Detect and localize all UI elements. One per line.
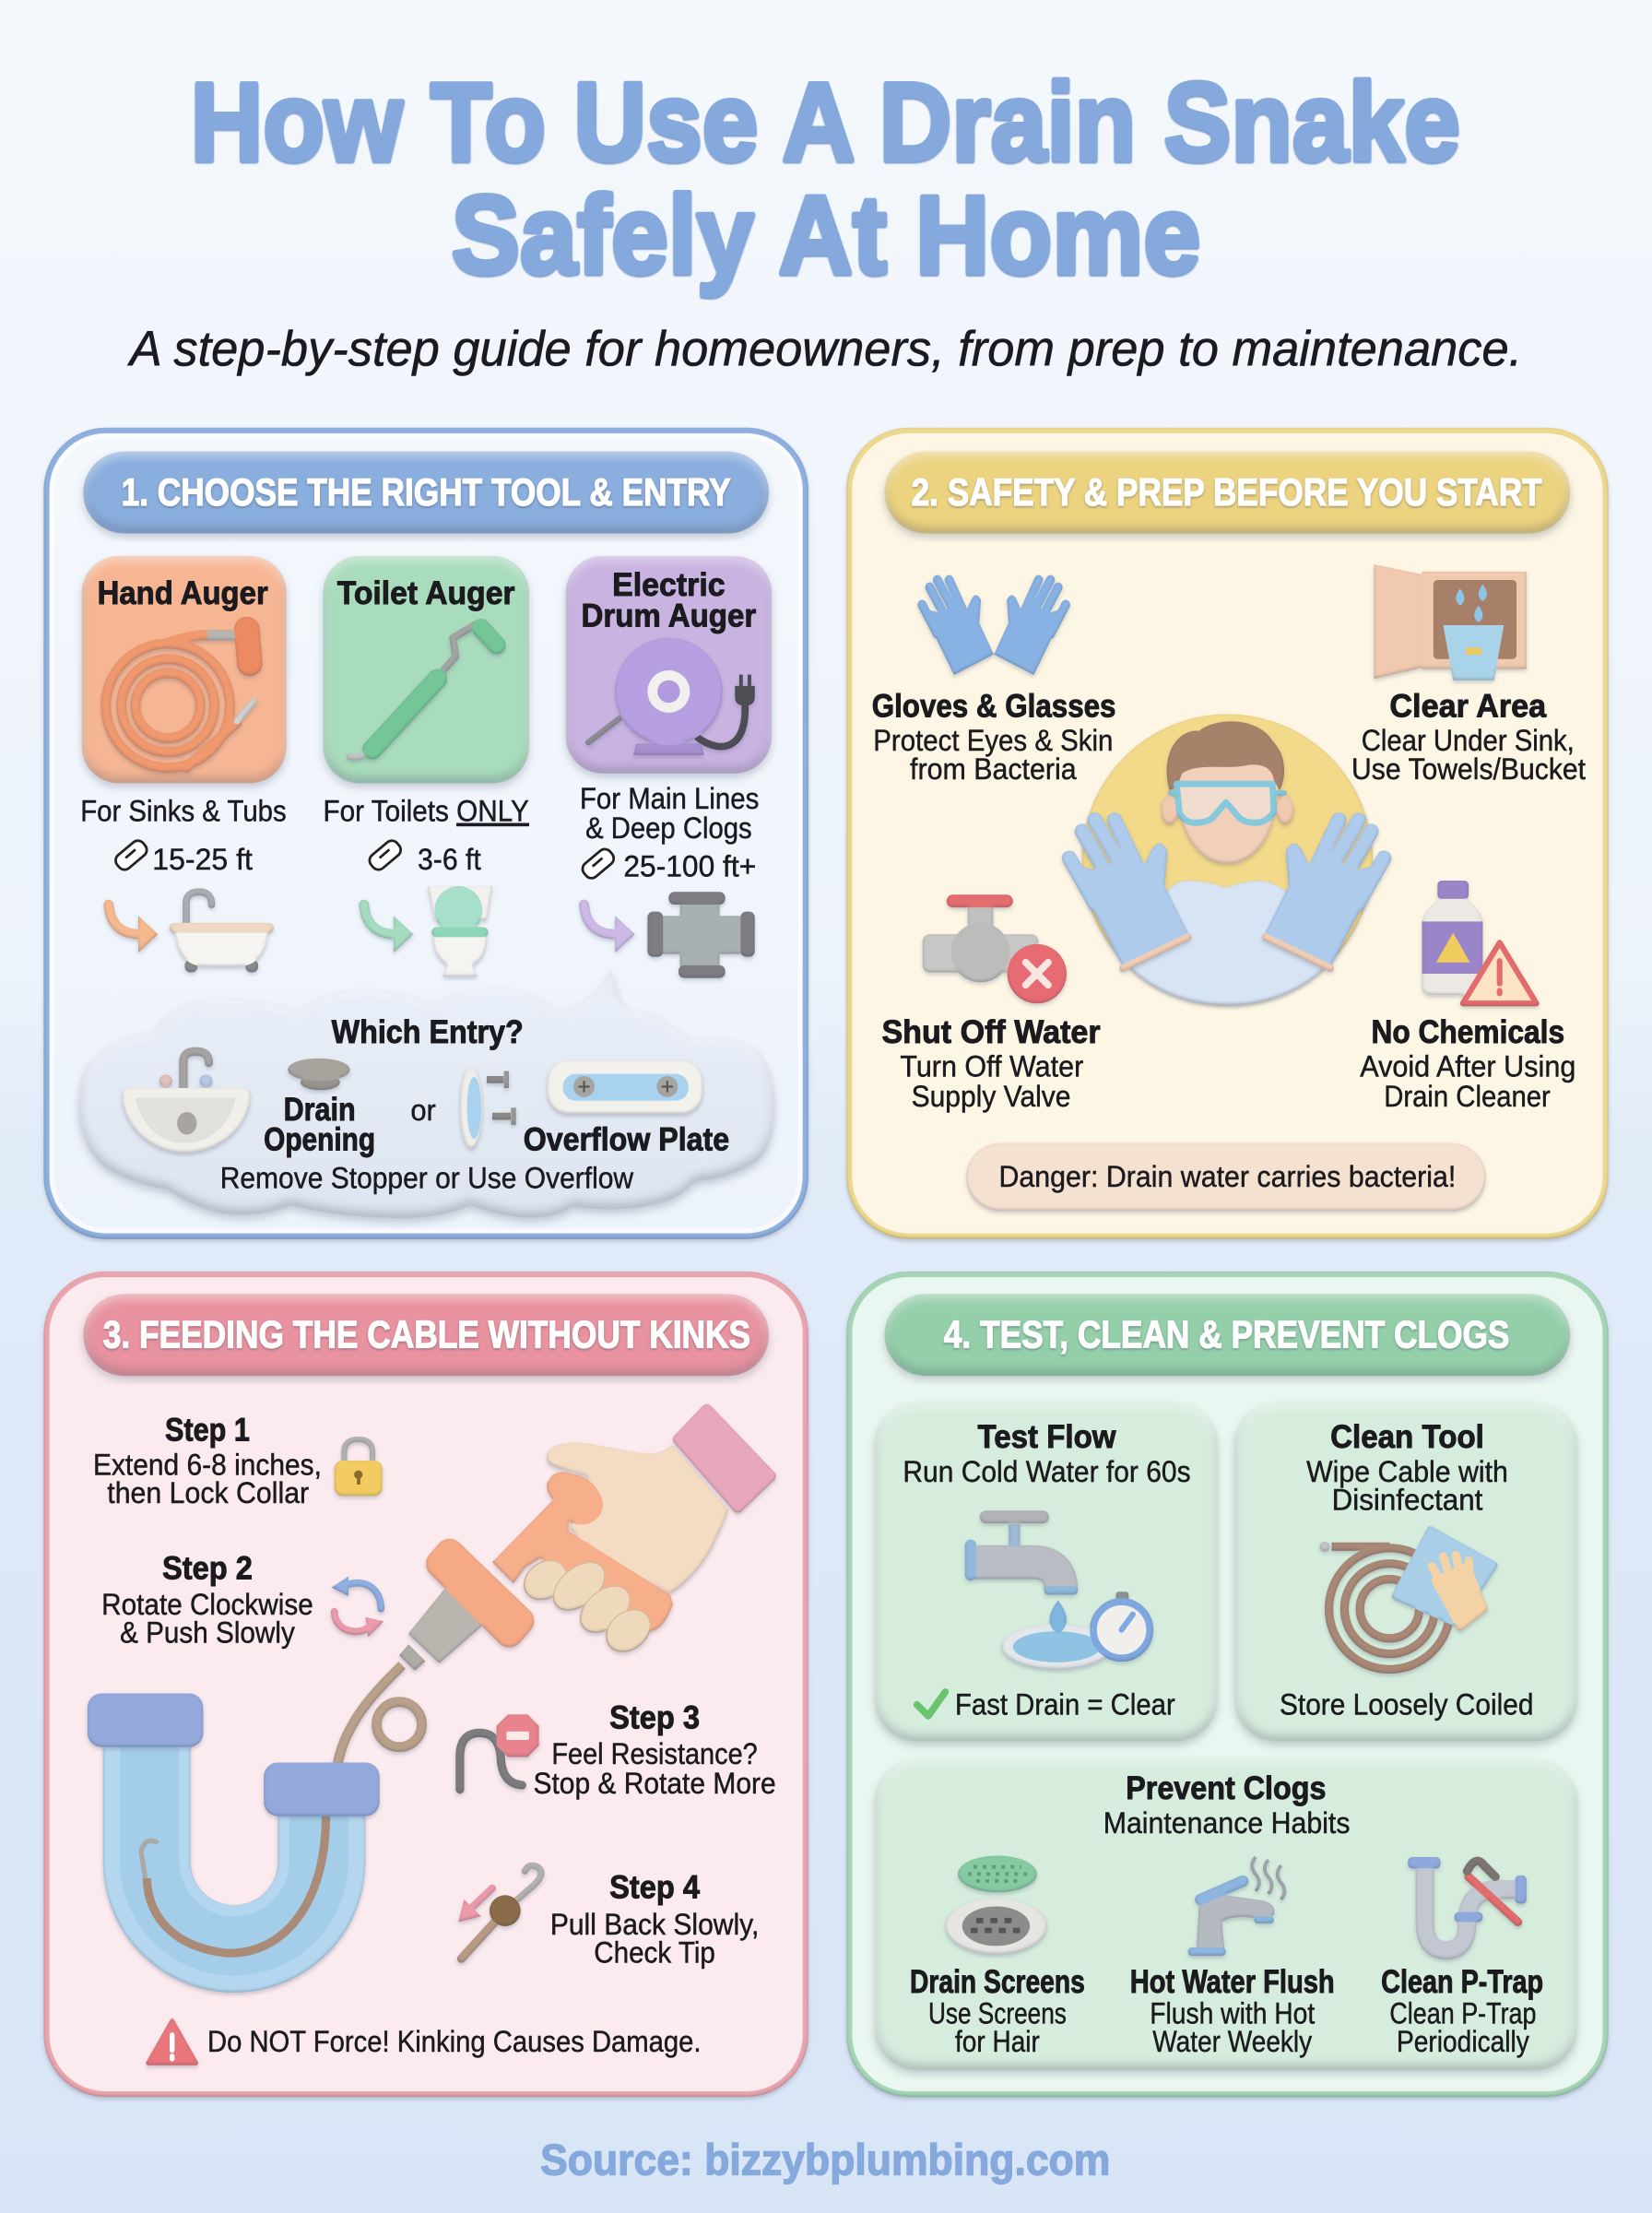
- title: How To Use A Drain Snake: [191, 61, 1460, 183]
- card: prevent clogs: Drain Screens: [910, 1964, 1085, 2000]
- danger callout: [966, 1143, 1485, 1211]
- danger callout: Danger: Drain water carries bacteria!: [998, 1160, 1456, 1193]
- step 1 text: Step 1: [165, 1413, 250, 1449]
- card: clean tool: [1234, 1402, 1577, 1741]
- step 2 text: Step 2: [162, 1551, 253, 1587]
- figure body: [1131, 881, 1323, 1005]
- left glove: [1069, 820, 1188, 968]
- callout cloud: which entry: Opening: [264, 1121, 375, 1157]
- card: prevent clogs: Periodically: [1397, 2025, 1529, 2058]
- card: test flow: Test Flow: [978, 1419, 1116, 1455]
- icon: sink: [122, 1051, 251, 1153]
- no chemicals text: Drain Cleaner: [1384, 1080, 1551, 1113]
- warning: do not force: Do NOT Force! Kinking Causes Damage.: [207, 2025, 702, 2058]
- icon: bathtub: [170, 892, 274, 972]
- icon: blue gloves: [922, 580, 1066, 674]
- shut off water text: [881, 1014, 1101, 1113]
- clear area text: [1351, 688, 1586, 786]
- callout cloud: which entry: Drain: [284, 1092, 356, 1128]
- tool descriptions: For Sinks & Tubs: [80, 795, 287, 828]
- tool card: toilet auger: [323, 556, 529, 783]
- icon: overflow plate: [548, 1060, 702, 1114]
- icon: pull back with debris: [458, 1865, 541, 1959]
- heading pill 1: 1. CHOOSE THE RIGHT TOOL & ENTRY: [122, 471, 731, 514]
- heading pill 4: 4. TEST, CLEAN & PREVENT CLOGS: [944, 1314, 1509, 1356]
- heading pill 4: [885, 1294, 1570, 1376]
- figure head and goggles: [1161, 721, 1293, 864]
- panel 1: choose the right tool and entry: [47, 431, 806, 1237]
- cable lengths with tape icons: 15-25 ft: [152, 843, 253, 876]
- step 1 text: Extend 6-8 inches,: [93, 1448, 322, 1481]
- heading pill 3: 3. FEEDING THE CABLE WITHOUT KINKS: [103, 1314, 750, 1356]
- panel 3: feeding the cable: [47, 1274, 806, 2094]
- card: test flow: Run Cold Water for 60s: [903, 1455, 1191, 1488]
- icon: chemical bottle and warning: [1422, 881, 1537, 1003]
- step 3 text: [533, 1700, 776, 1800]
- card: clean tool: Clean Tool: [1330, 1419, 1484, 1455]
- card: prevent clogs: Maintenance Habits: [1103, 1806, 1351, 1840]
- step 2 text: Rotate Clockwise: [101, 1588, 313, 1621]
- card: prevent clogs: Prevent Clogs: [1126, 1770, 1326, 1806]
- panel 4: test, clean and prevent: [849, 1274, 1605, 2094]
- tool card: electric drum auger: Electric: [612, 567, 726, 603]
- callout cloud: which entry: or: [410, 1094, 436, 1127]
- icon: rotate arrows: [332, 1576, 384, 1637]
- title: Safely At Home: [452, 173, 1200, 296]
- tool card: toilet auger: Toilet Auger: [337, 575, 515, 611]
- shut off water text: Supply Valve: [912, 1080, 1071, 1113]
- clear area text: Clear Area: [1389, 688, 1547, 724]
- gloves and glasses text: from Bacteria: [910, 752, 1077, 786]
- callout cloud: which entry: [79, 969, 774, 1218]
- icon: drain stopper: [288, 1059, 350, 1090]
- card: clean tool: Wipe Cable with: [1306, 1455, 1508, 1488]
- step 3 text: Feel Resistance?: [551, 1737, 758, 1770]
- card: clean tool: Store Loosely Coiled: [1280, 1687, 1533, 1721]
- step 4 text: [550, 1869, 759, 1970]
- subtitle: A step-by-step guide for homeowners, from prep to maintenance.: [127, 322, 1522, 376]
- cable lengths with tape icons: 3-6 ft: [418, 843, 481, 876]
- card: prevent clogs: for Hair: [955, 2025, 1040, 2058]
- icon: check mark: [917, 1692, 945, 1716]
- cable lengths with tape icons: 25-100 ft+: [623, 849, 756, 882]
- central figure with goggles and gloves: [1069, 714, 1384, 1005]
- step 1 text: then Lock Collar: [107, 1476, 309, 1509]
- icon: shut-off valve: [923, 894, 1067, 1003]
- card: prevent clogs: Clean P-Trap: [1381, 1964, 1543, 2000]
- right glove: [1266, 820, 1384, 968]
- heading pill 2: 2. SAFETY & PREP BEFORE YOU START: [912, 471, 1542, 514]
- shut off water text: Shut Off Water: [881, 1014, 1101, 1050]
- heading pill 1: [83, 452, 769, 534]
- tool card: hand auger: Hand Auger: [98, 575, 268, 611]
- tool card: hand auger: [82, 556, 287, 783]
- gloves and glasses text: Protect Eyes & Skin: [873, 724, 1113, 757]
- step 2 text: [101, 1551, 313, 1649]
- tool descriptions: [80, 782, 759, 845]
- arrow: toilet auger to toilet: [364, 905, 413, 953]
- step 4 text: Check Tip: [594, 1936, 715, 1970]
- illustration: kinked cable loop: [337, 1665, 422, 1767]
- arrow: drum auger to main line: [584, 905, 635, 953]
- heading pill 3: [83, 1294, 769, 1376]
- shut off water text: Turn Off Water: [900, 1050, 1084, 1083]
- step 1 text: [93, 1413, 322, 1509]
- icon: p-trap and wrench: [1408, 1857, 1527, 1950]
- step 4 text: Step 4: [609, 1869, 700, 1905]
- icon: toilet: [428, 886, 492, 976]
- clear area text: Clear Under Sink,: [1362, 724, 1575, 757]
- no chemicals text: No Chemicals: [1371, 1014, 1564, 1050]
- card: prevent clogs: Flush with Hot: [1150, 1997, 1315, 2030]
- step 4 text: Pull Back Slowly,: [550, 1908, 759, 1941]
- tool descriptions: For Main Lines: [580, 782, 759, 815]
- no chemicals text: [1360, 1014, 1575, 1113]
- tool descriptions: For Toilets ONLY: [323, 795, 529, 828]
- gloves and glasses text: [872, 688, 1115, 786]
- card: test flow: Fast Drain = Clear: [955, 1687, 1175, 1721]
- icon: toilet auger: [350, 623, 497, 757]
- tool card: electric drum auger: Drum Auger: [581, 598, 757, 634]
- icon: padlock: [335, 1439, 383, 1496]
- icon: faucet, drain and stopwatch: [965, 1517, 1150, 1669]
- card: test flow: [875, 1402, 1218, 1741]
- warning: do not force: [148, 2020, 702, 2063]
- icon: hot water faucet: [1188, 1857, 1284, 1956]
- no chemicals text: Avoid After Using: [1360, 1050, 1575, 1083]
- cable lengths with tape icons: [112, 838, 756, 882]
- tool descriptions: & Deep Clogs: [585, 811, 752, 845]
- card: clean tool: Disinfectant: [1332, 1484, 1482, 1517]
- callout cloud: which entry: Remove Stopper or Use Overflow: [220, 1162, 634, 1195]
- card: prevent clogs: Hot Water Flush: [1130, 1964, 1335, 2000]
- heading pill 2: [885, 452, 1570, 534]
- gloves and glasses text: Gloves & Glasses: [872, 688, 1115, 724]
- card: prevent clogs: [875, 1759, 1577, 2070]
- card: prevent clogs: Water Weekly: [1152, 2025, 1312, 2058]
- card: prevent clogs: Clean P-Trap: [1389, 1997, 1537, 2030]
- title: [191, 61, 1460, 296]
- icon: hand auger coil: [106, 630, 254, 768]
- arrow: hand auger to tub: [109, 905, 158, 953]
- source line: Source: bizzybplumbing.com: [540, 2136, 1110, 2184]
- icon: cabinet with bucket: [1375, 564, 1527, 680]
- illustration: p-trap with cable: [85, 1693, 384, 1995]
- clear area text: Use Towels/Bucket: [1351, 752, 1586, 786]
- icon: coiled cable with cloth and hand: [1320, 1530, 1494, 1669]
- step 3 text: Step 3: [609, 1700, 700, 1736]
- tool card: electric drum auger: [566, 556, 772, 774]
- icon: resistance stop: [460, 1714, 539, 1790]
- callout cloud: which entry: Overflow Plate: [524, 1121, 729, 1157]
- icon: drain screen: [945, 1855, 1046, 1955]
- icon: overflow plate parts: [460, 1067, 513, 1149]
- panel 2: safety and prep: [849, 431, 1605, 1237]
- card: prevent clogs: Use Screens: [928, 1997, 1067, 2030]
- icon: drum auger: [588, 638, 755, 755]
- illustration: hand turning the auger handle: [399, 1410, 771, 1671]
- step 2 text: & Push Slowly: [120, 1615, 295, 1649]
- step 3 text: Stop & Rotate More: [533, 1767, 776, 1800]
- icon: cross pipe: [647, 892, 755, 978]
- callout cloud: which entry: Which Entry?: [332, 1014, 524, 1050]
